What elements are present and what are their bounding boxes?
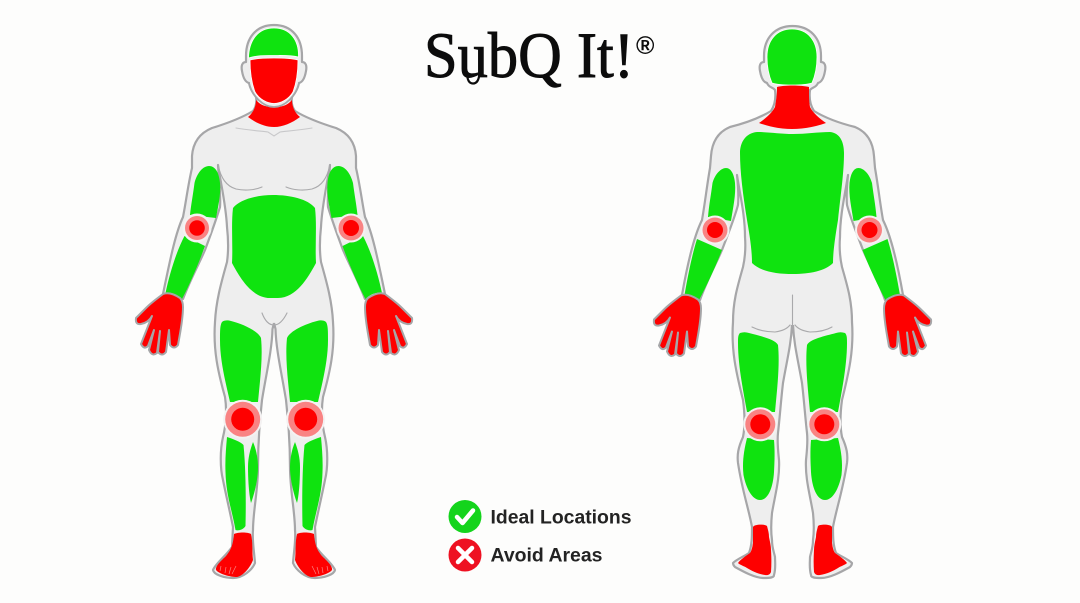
neck: avoid area, back: [759, 86, 826, 129]
knee: avoid area, right: [286, 400, 325, 439]
knee: avoid area, left: [743, 407, 777, 441]
calf: ideal area, left: [743, 438, 775, 500]
abdomen: ideal area: [232, 195, 316, 298]
elbow: avoid area, right: [855, 216, 884, 244]
thigh: ideal area, left: [738, 332, 779, 412]
label: ideal locations: Ideal Locations: [490, 508, 632, 528]
body silhouette: front: [163, 25, 385, 578]
elbow: avoid area, left: [182, 214, 212, 242]
forearm: ideal area, right: [342, 236, 382, 299]
calf: ideal area, right: [810, 438, 842, 500]
shin: ideal areas, right: [290, 437, 323, 530]
face: avoid area: [250, 58, 298, 104]
hand: avoid area, right: [365, 293, 412, 354]
icon: red cross: [448, 538, 482, 572]
thigh: ideal area, left: [220, 320, 262, 402]
legend: [448, 500, 632, 572]
foot: avoid area, right: [814, 525, 847, 575]
foot: avoid area, left: [738, 525, 771, 575]
forearm: ideal area, right: [862, 239, 900, 300]
label: avoid areas: Avoid Areas: [490, 546, 602, 566]
hand: avoid area, left: [136, 293, 183, 354]
knee: avoid area, right: [807, 407, 841, 441]
upper arm: ideal area, left: [708, 168, 735, 221]
hand: avoid area, right: [884, 295, 931, 356]
back: ideal area: [740, 132, 844, 274]
hand: avoid area, left: [654, 295, 701, 356]
forearm: ideal area, left: [684, 239, 722, 300]
knee: avoid area, left: [223, 400, 262, 439]
jawline: [249, 83, 299, 107]
head: ideal scalp area: [248, 28, 299, 58]
thigh: ideal area, right: [806, 332, 847, 412]
upper arm: ideal area, left: [190, 166, 220, 218]
title: ®: [636, 32, 655, 60]
figure: front view of body: [136, 25, 412, 578]
upper arm: ideal area, right: [849, 168, 876, 221]
upper arm: ideal area, right: [327, 166, 358, 218]
anatomy lines: buttocks: [752, 295, 832, 332]
title: SubQ It!: [424, 20, 634, 92]
anatomy lines: chest and hips: [218, 128, 330, 325]
foot: avoid area, left: [216, 532, 253, 577]
foot: avoid area, right: [295, 532, 332, 577]
legend item: ideal locations: [448, 500, 632, 533]
figure: back view of body: [654, 26, 931, 578]
icon: green check: [448, 500, 482, 533]
elbow: avoid area, right: [336, 214, 366, 242]
elbow: avoid area, left: [700, 216, 730, 244]
forearm: ideal area, left: [166, 236, 205, 299]
head: ideal area, back: [767, 29, 817, 85]
shin: ideal areas, left: [225, 437, 258, 530]
body silhouette: back: [682, 26, 903, 578]
thigh: ideal area, right: [286, 320, 328, 402]
legend item: avoid areas: [448, 538, 602, 572]
neck: avoid area: [248, 100, 300, 127]
